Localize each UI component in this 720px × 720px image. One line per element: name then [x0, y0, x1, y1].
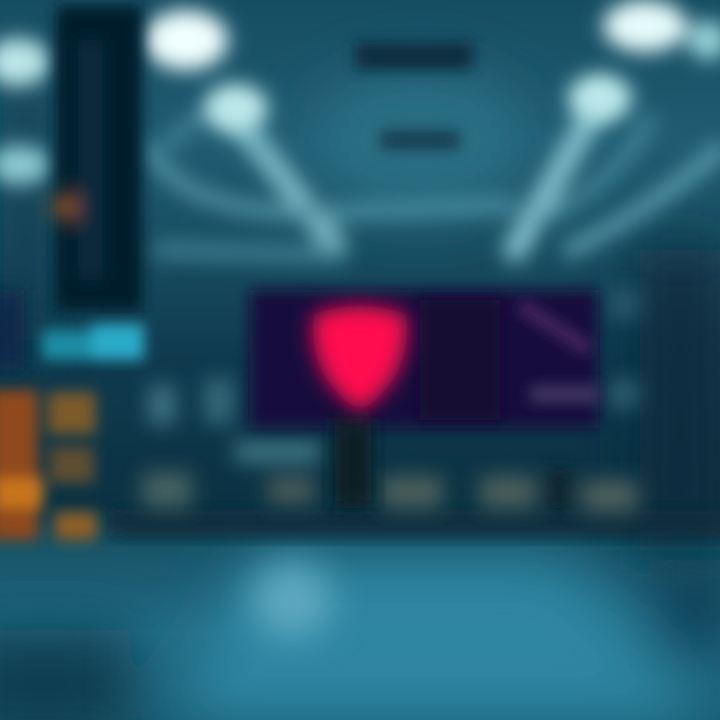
- panel details: [420, 300, 600, 420]
- mid-left blurred equipment: [142, 378, 320, 508]
- floor: [0, 560, 720, 720]
- panel stand: [335, 418, 371, 508]
- orange shelves: [0, 390, 97, 540]
- dark base band: [110, 510, 720, 536]
- rack glow: [0, 40, 102, 370]
- light trails: [150, 100, 720, 255]
- ceiling vents: [355, 42, 473, 150]
- cyan lights: [42, 324, 144, 360]
- ceiling glow: [0, 70, 720, 550]
- red shield: [313, 306, 407, 412]
- ceiling lights: [0, 0, 720, 185]
- dark rack column: [56, 6, 142, 310]
- floor highlight: [252, 562, 332, 638]
- base equipment row: [382, 290, 638, 512]
- display panel: [250, 290, 598, 428]
